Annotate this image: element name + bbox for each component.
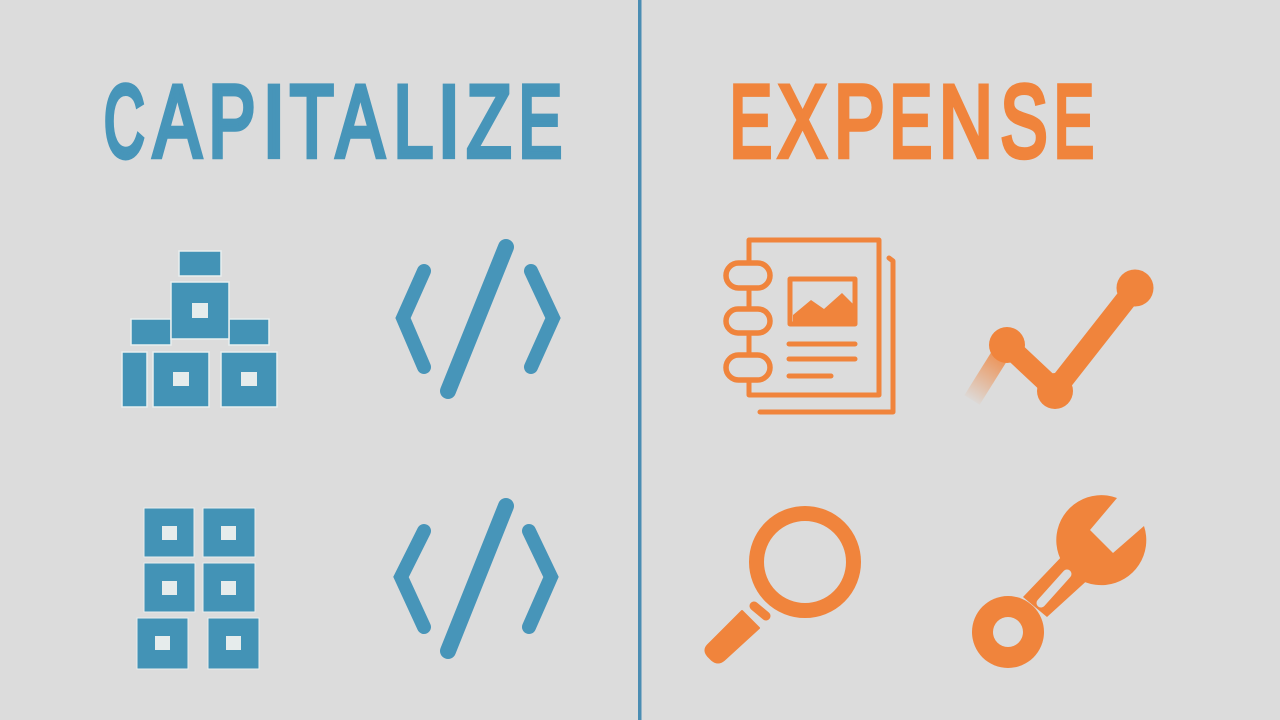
title: expense: P [834,66,885,179]
center divider [638,0,642,720]
icon: code brackets top [403,247,553,391]
icon: stacked boxes [122,251,277,407]
title: capitalize: P [208,65,255,179]
title: capitalize: I [437,64,461,178]
title: capitalize: C [104,65,145,179]
icon: box grid [137,508,259,669]
title: capitalize: E [518,65,562,179]
title: expense [730,64,1094,179]
title: expense: N [939,64,993,178]
title: capitalize [104,64,562,179]
title: capitalize: A [154,64,201,179]
title: expense: E [1054,64,1094,178]
icon: wrench [972,495,1146,668]
icon: magnifier [706,514,854,662]
title: expense: X [778,64,827,178]
title: expense: E [730,64,772,178]
title: capitalize: A [336,64,384,179]
icon: trend line [972,270,1154,409]
title: capitalize: Z [466,65,511,178]
title: expense: E [890,64,932,178]
title: capitalize: I [262,64,286,178]
title: expense: S [1000,65,1047,179]
icon: notebook [726,240,893,412]
title: capitalize: L [394,64,433,179]
icon: code brackets bottom [401,506,551,651]
title: capitalize: T [290,64,334,179]
